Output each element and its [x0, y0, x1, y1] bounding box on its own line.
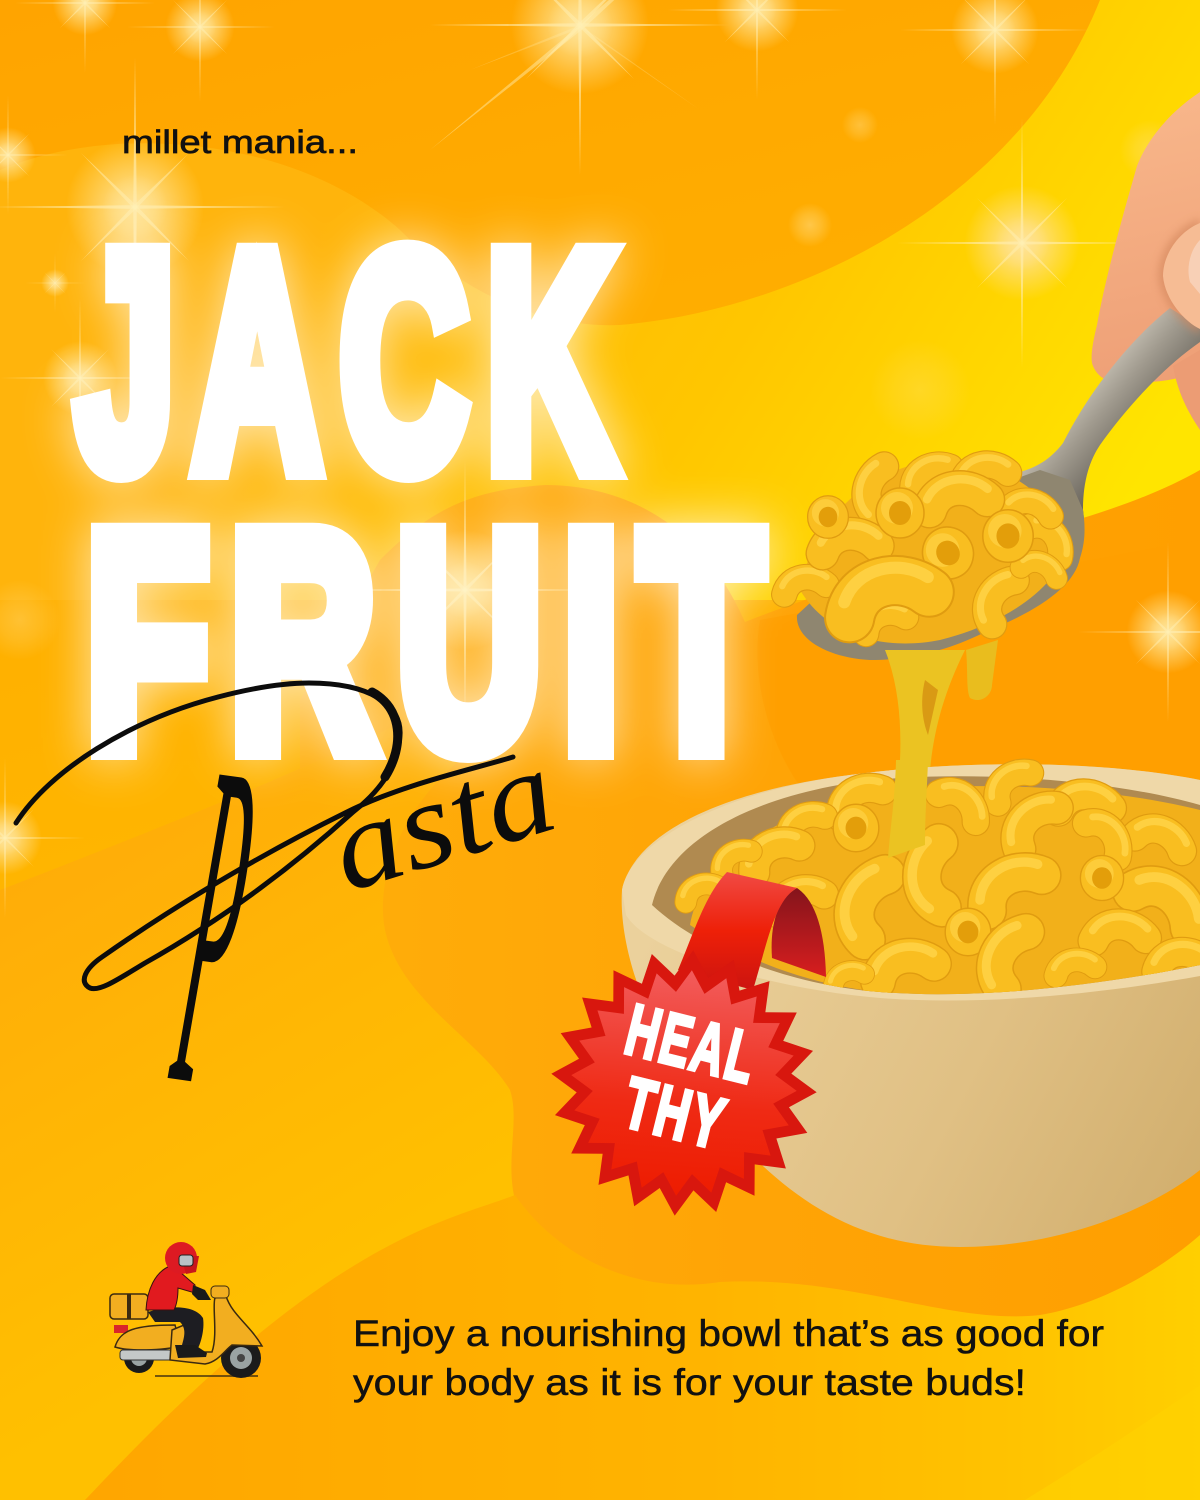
- headline: JACK: [76, 190, 633, 533]
- hand behind spoon: [1092, 92, 1200, 430]
- spoon: [797, 308, 1200, 660]
- headline: FRUIT: [86, 470, 784, 813]
- script word: Pasta: P: [152, 664, 277, 1187]
- sparkles: [0, 0, 1200, 918]
- badge text: THY: [616, 1063, 734, 1165]
- ribbon: [678, 872, 826, 990]
- tagline: Enjoy a nourishing bowl that’s as good for: [353, 1313, 1104, 1354]
- brand line: millet mania...: [122, 124, 358, 160]
- thumb: [1158, 218, 1200, 334]
- script word: Pasta: [16, 664, 570, 1187]
- icon: delivery rider on scooter: [110, 1242, 262, 1378]
- tagline: [353, 1313, 1104, 1403]
- macaroni in bowl: [683, 762, 1200, 993]
- macaroni on spoon: [781, 453, 1070, 643]
- tagline: your body as it is for your taste buds!: [353, 1362, 1026, 1403]
- script word: Pasta: asta: [315, 721, 570, 918]
- headline: [76, 190, 784, 813]
- badge: healthy: [542, 941, 826, 1225]
- cheese drip: [885, 640, 998, 850]
- cheese strand over bowl pasta: [888, 760, 928, 858]
- badge text: [616, 990, 766, 1165]
- bowl: [622, 764, 1200, 1247]
- badge text: HEAL: [618, 990, 766, 1099]
